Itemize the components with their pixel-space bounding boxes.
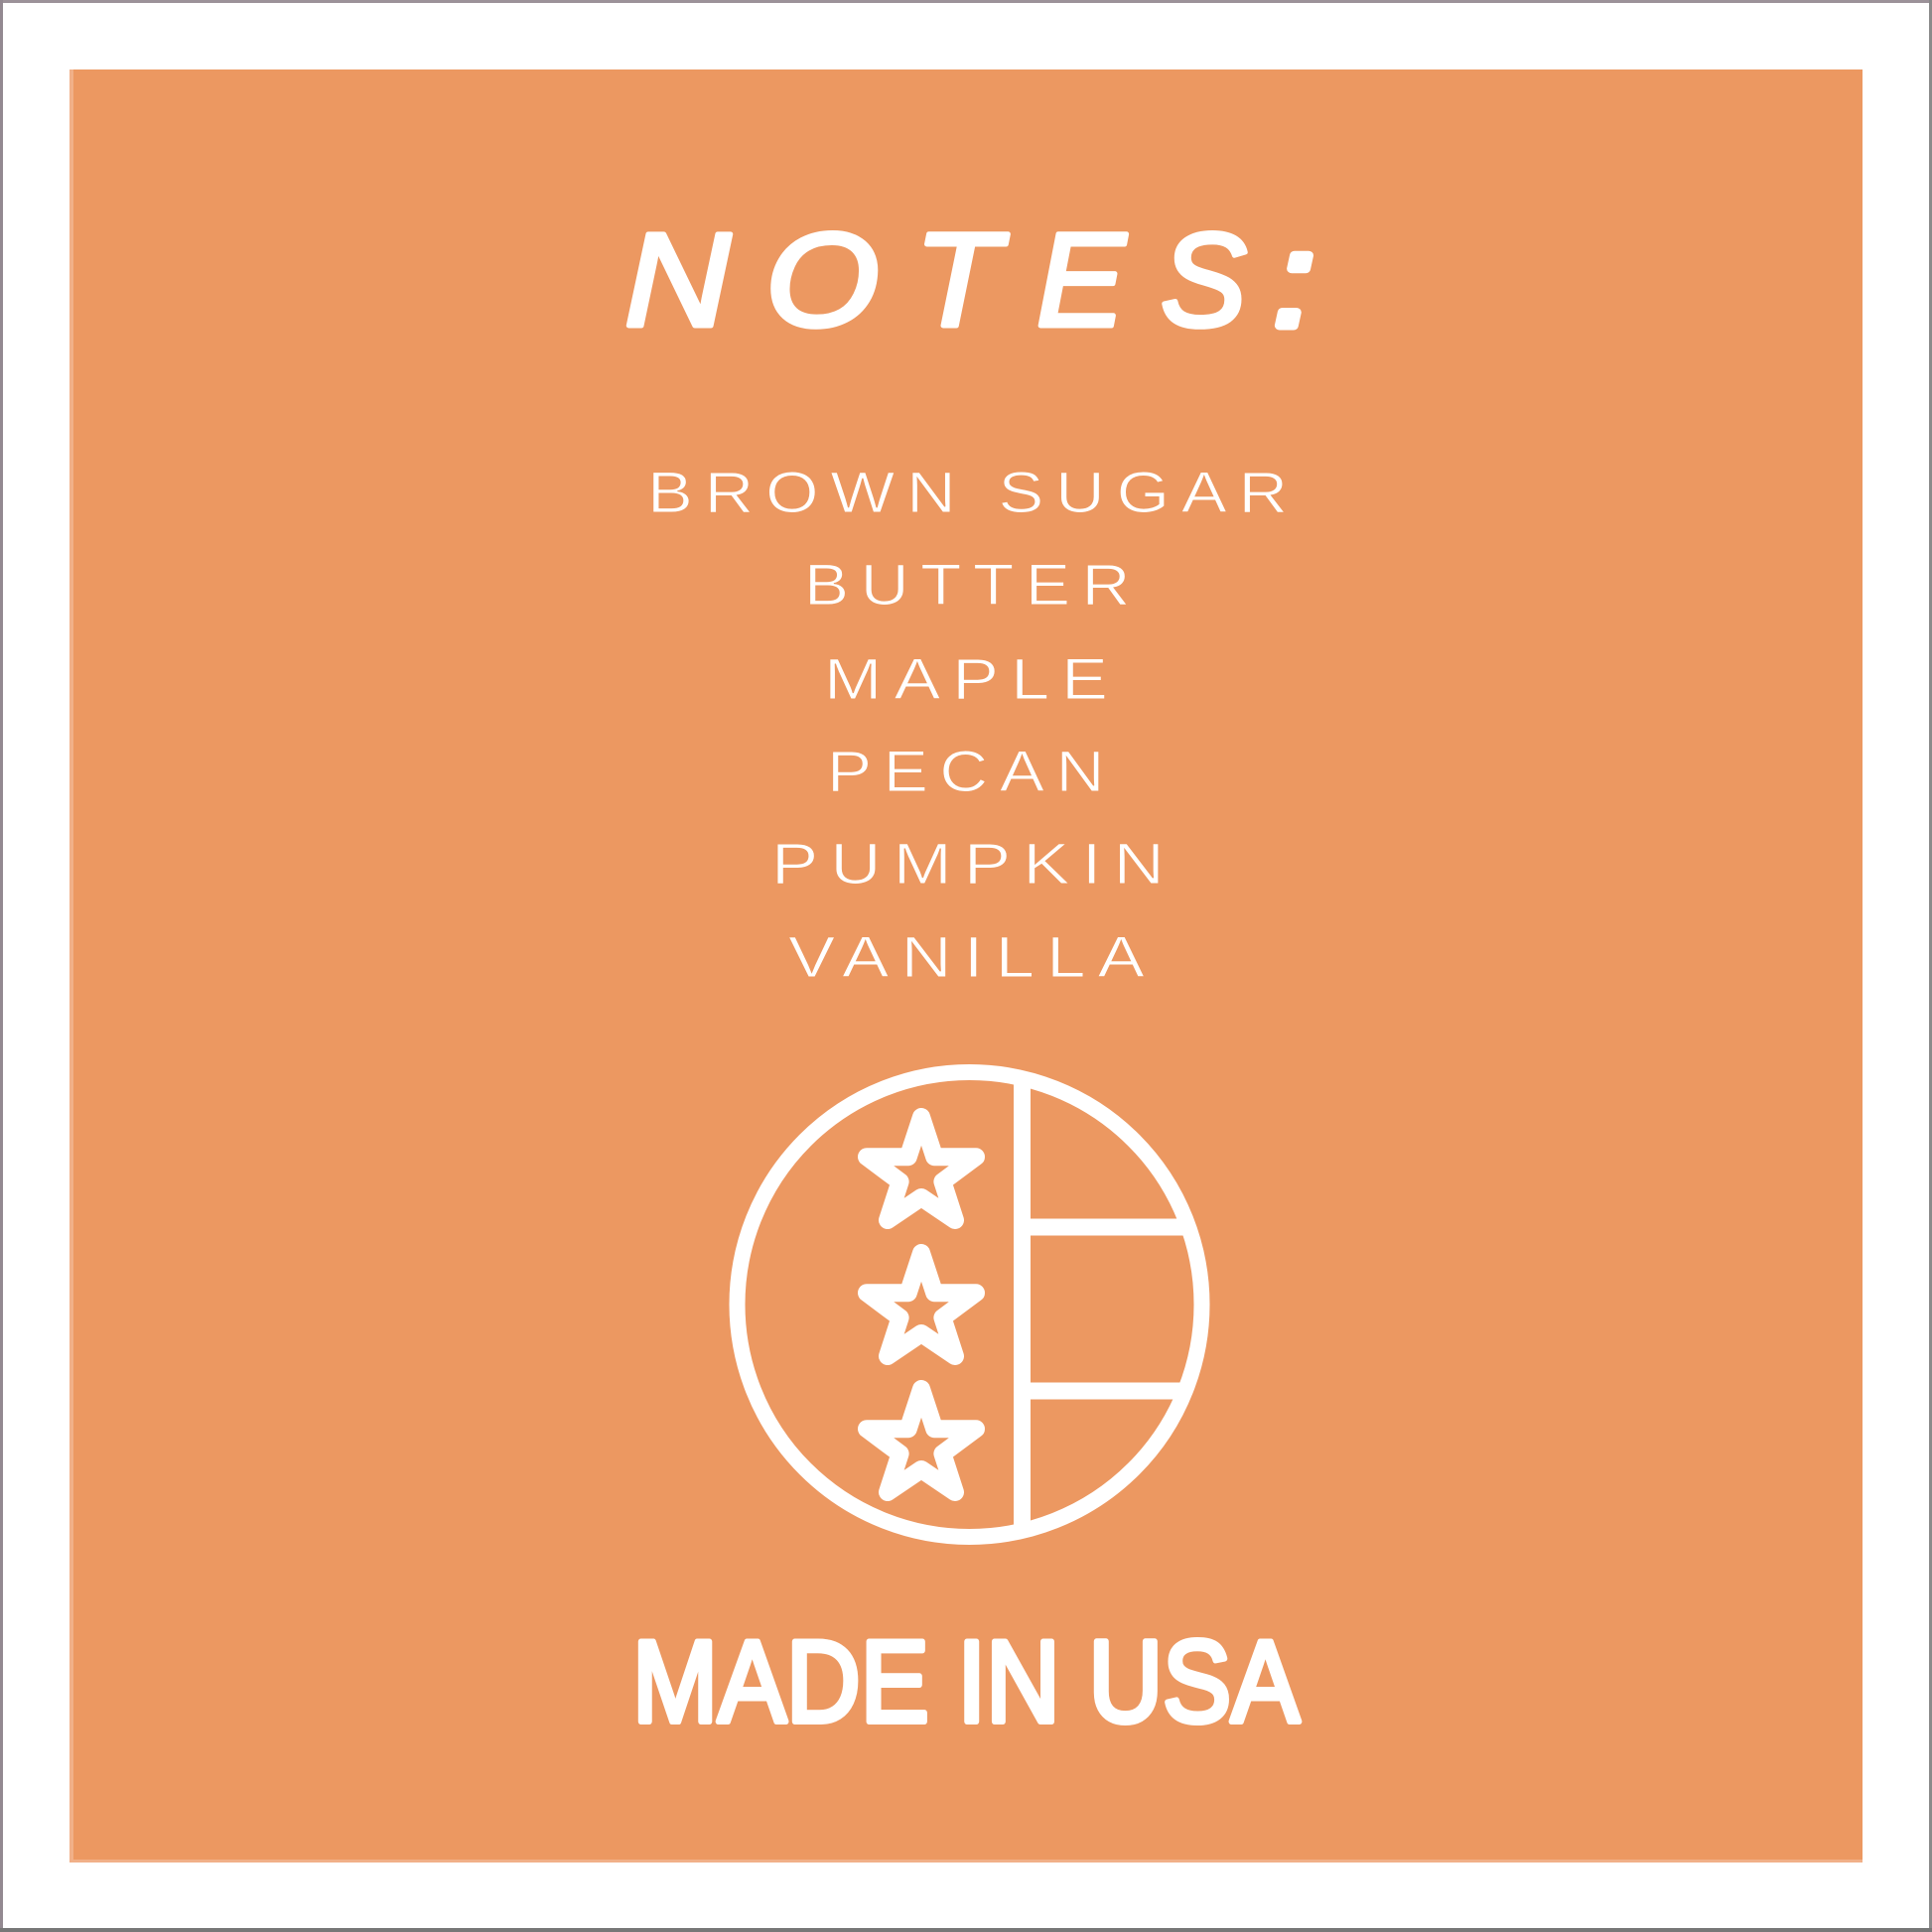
star 2 — [867, 1253, 976, 1356]
note: vanilla: VANILLA — [788, 925, 1157, 990]
flag stripes — [1023, 1074, 1189, 1535]
note: pecan: PECAN — [827, 740, 1116, 804]
note: brown sugar: BROWN SUGAR — [647, 461, 1300, 525]
title: NOTES: N — [624, 205, 731, 354]
icon: USA flag circle badge — [737, 1072, 1201, 1537]
title: NOTES: T — [914, 207, 1009, 354]
note: maple: MAPLE — [824, 647, 1120, 712]
badge outer circle — [737, 1072, 1201, 1537]
title: NOTES: S — [1161, 206, 1247, 353]
note: pumpkin: PUMPKIN — [771, 832, 1176, 897]
star 3 — [867, 1389, 976, 1492]
title: NOTES: O — [765, 205, 880, 354]
footer label: MADE IN USA: MADE IN USA — [632, 1616, 1300, 1746]
star 1 — [867, 1117, 976, 1220]
flag stars — [867, 1117, 976, 1492]
title: NOTES — [624, 205, 1314, 354]
title: NOTES: : — [1274, 205, 1314, 354]
note: butter: BUTTER — [804, 553, 1142, 618]
list of flavor notes — [647, 461, 1300, 990]
title: NOTES: E — [1036, 207, 1127, 354]
